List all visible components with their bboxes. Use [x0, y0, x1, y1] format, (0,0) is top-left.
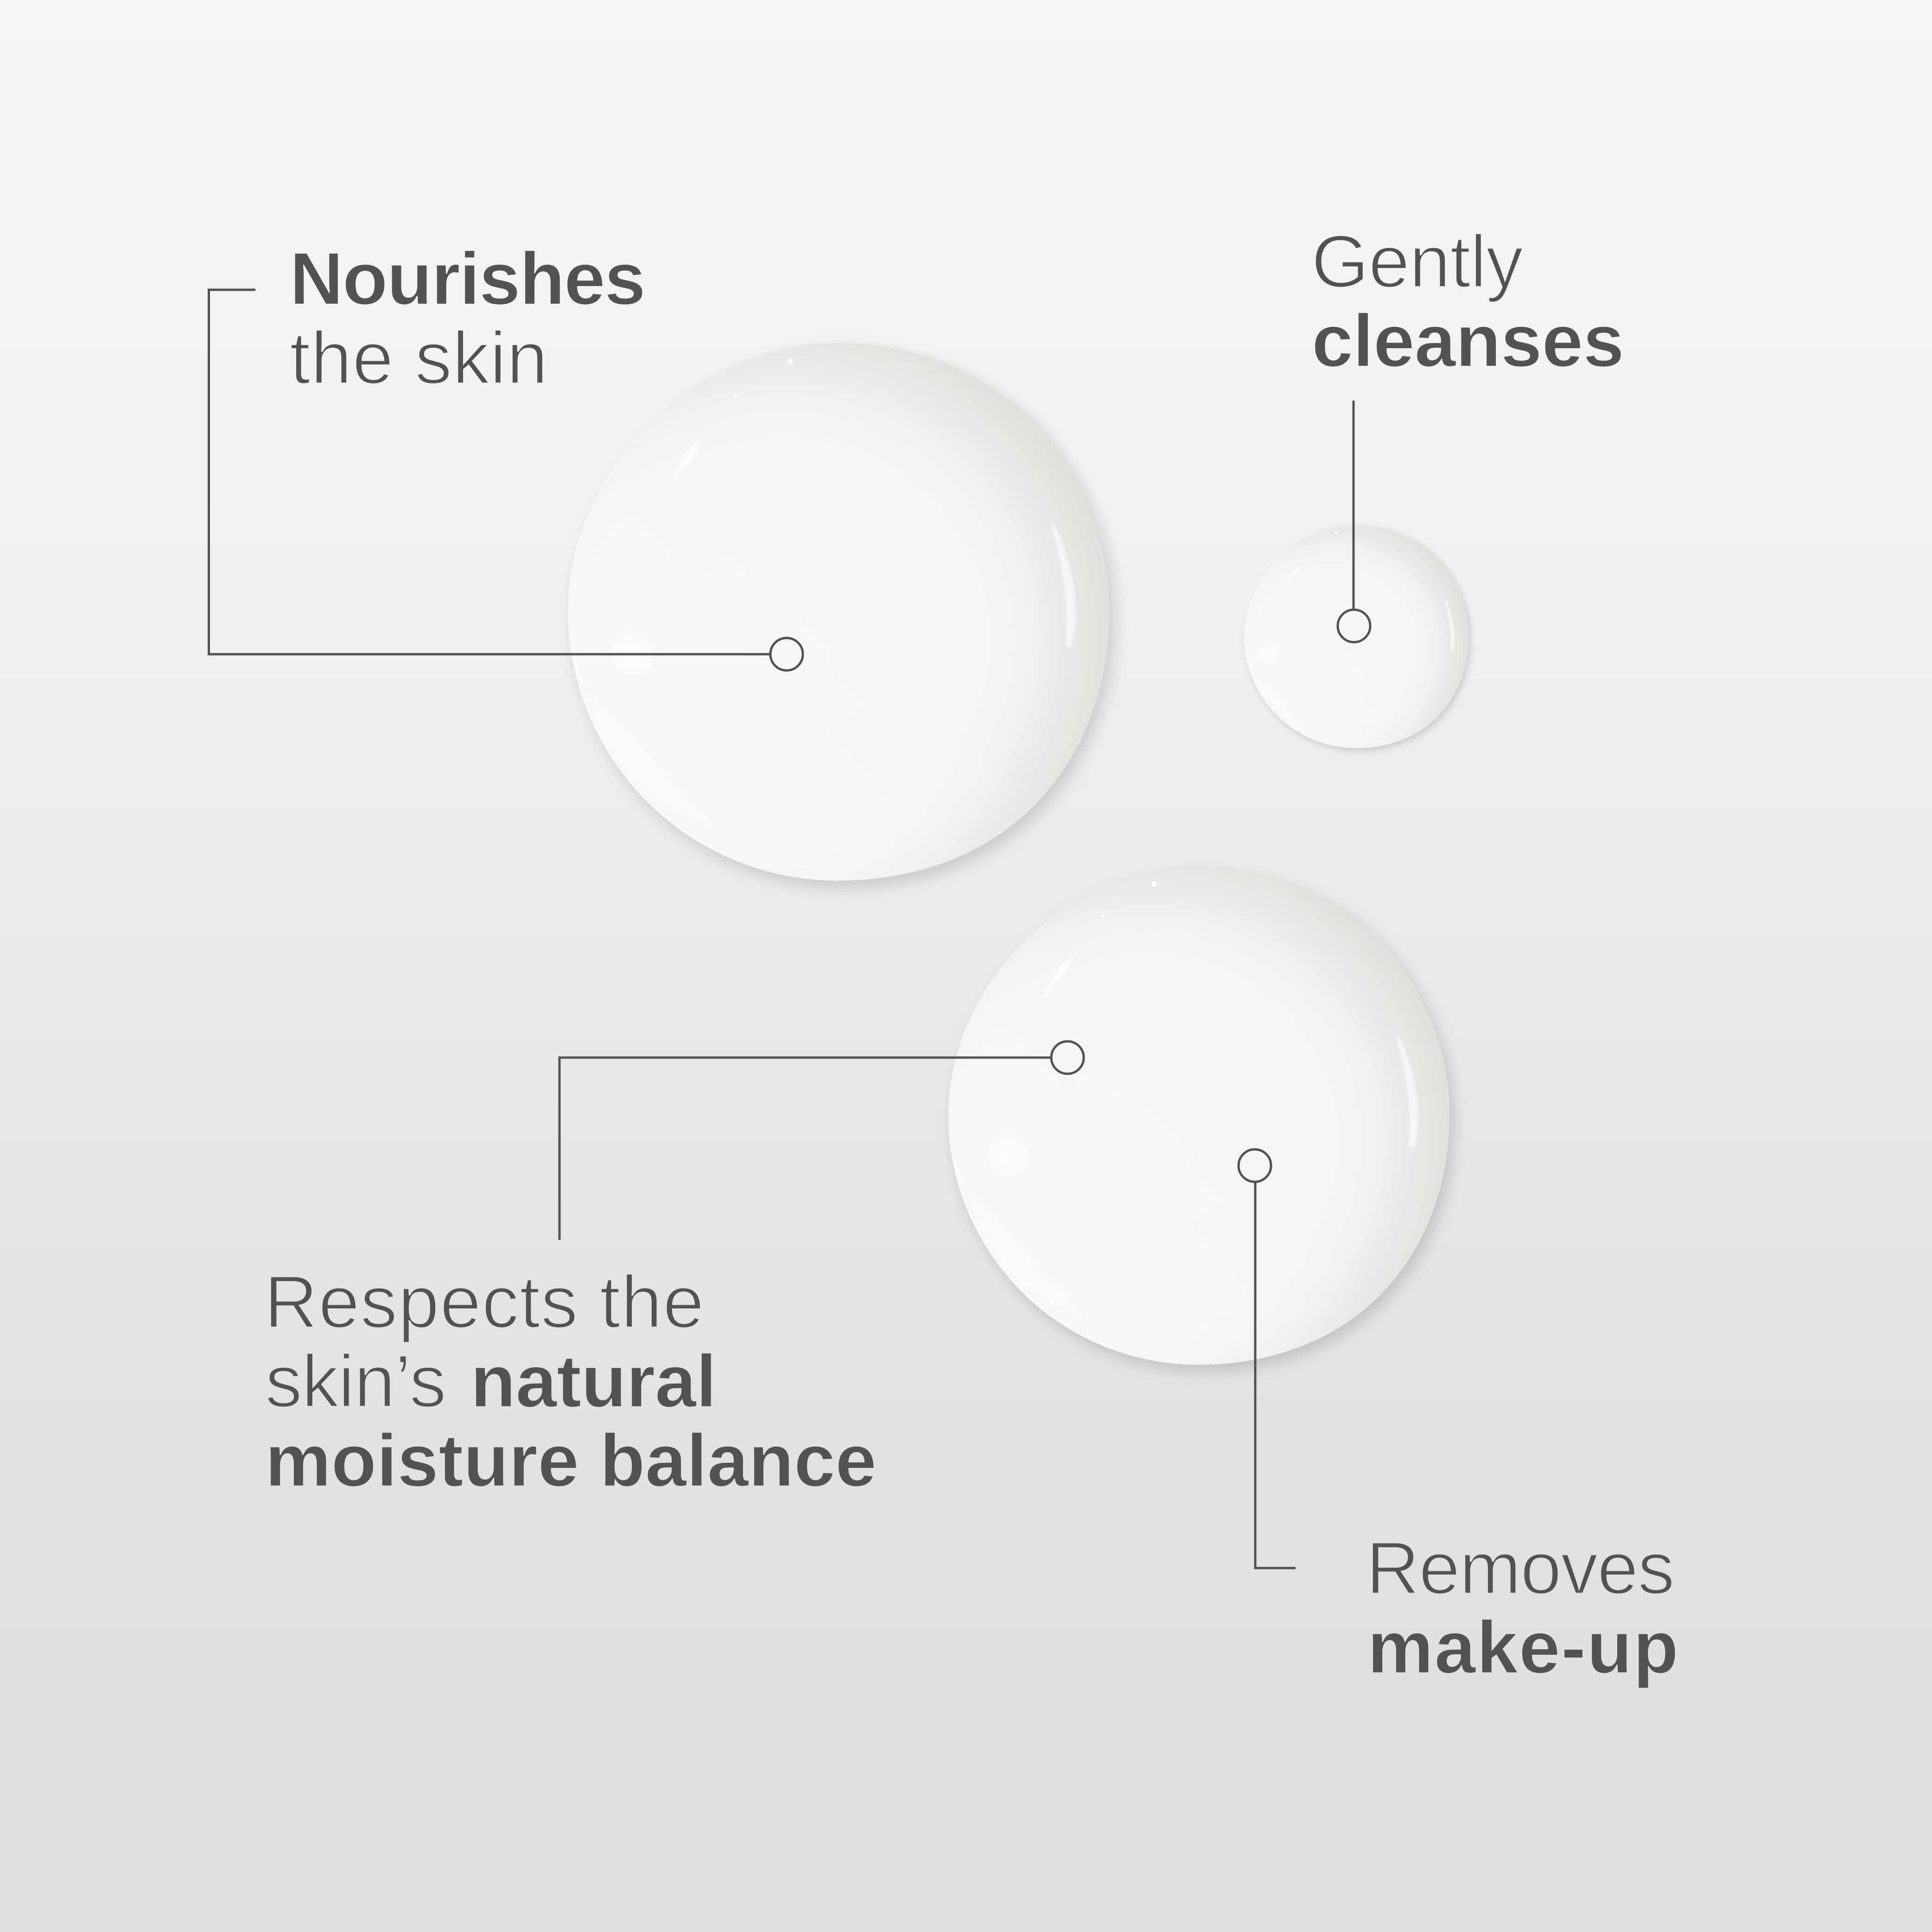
text: respects the skin's natural moisture balance	[264, 1260, 877, 1502]
text: respects the skin's natural moisture balance: skin’s	[265, 1339, 446, 1422]
medium drop: moisture and make-up	[948, 867, 1455, 1371]
large drop: nourishes	[568, 343, 1115, 887]
text: nourishes the skin: the skin	[290, 316, 548, 399]
text: gently cleanses: cleanses	[1312, 299, 1624, 382]
text: removes make-up: Removes	[1366, 1526, 1675, 1609]
text: respects the skin's natural moisture balance: moisture balance	[265, 1419, 877, 1502]
text: gently cleanses	[1311, 220, 1624, 382]
text: removes make-up	[1366, 1526, 1678, 1689]
callout: moisture balance leader line and marker	[559, 1041, 1084, 1240]
small drop: cleanses	[1244, 525, 1471, 751]
text: removes make-up: make-up	[1367, 1606, 1678, 1689]
callout: make-up leader line and marker	[1239, 1149, 1296, 1568]
text: nourishes the skin: Nourishes	[290, 237, 646, 320]
text: respects the skin's natural moisture balance: natural	[470, 1339, 717, 1422]
text: respects the skin's natural moisture balance: Respects the	[264, 1260, 704, 1343]
text: gently cleanses: Gently	[1311, 220, 1523, 303]
text: nourishes the skin	[290, 237, 646, 399]
callout: cleanses leader line and marker	[1338, 401, 1370, 642]
callout: nourishes leader line and marker	[209, 290, 803, 670]
